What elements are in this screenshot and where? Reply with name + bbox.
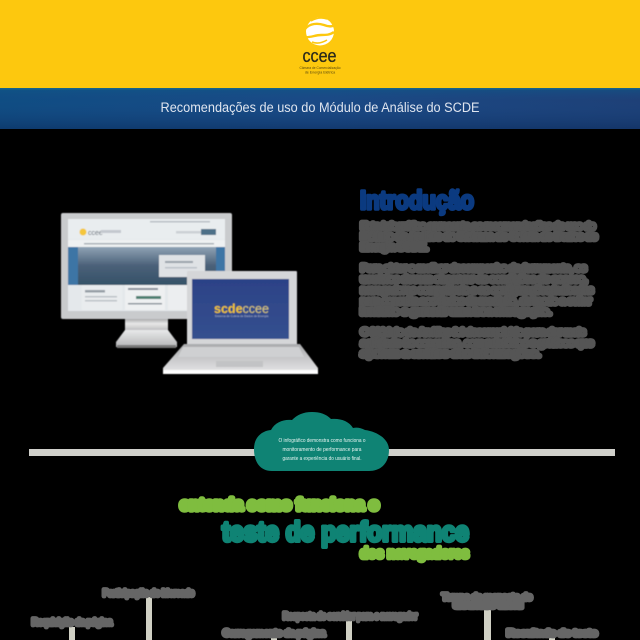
label 1: Participação de Mercado <box>103 588 194 598</box>
logo: ccee: de Energia Elétrica <box>305 70 335 74</box>
laptop: Sistema de Coleta de Dados de Energia <box>215 314 269 318</box>
timeline stem 5 <box>271 637 277 640</box>
illustration: desktop monitor and laptop <box>61 213 318 374</box>
cloud callout: garante a experiência do usuário final. <box>282 456 362 462</box>
monitor screen: website: ccee <box>88 230 103 237</box>
text block: intro paragraph 3: apoiam a análise das informações. <box>361 348 540 360</box>
heading: teste de performance: teste de performance <box>222 516 469 547</box>
text block: intro paragraph 2: lentidão e garantir uma boa navegação. <box>361 306 551 318</box>
monitor body <box>61 213 232 319</box>
text block: intro paragraph 2: Para obter o melhor desempenho da ferramenta, os <box>361 263 586 274</box>
laptop <box>163 271 318 374</box>
heading: entenda como funciona o: entenda como funciona o <box>180 495 379 514</box>
label 5: usuário final <box>454 600 522 610</box>
timeline stem 1 <box>146 597 152 640</box>
logo: ccee: ccee <box>302 46 336 66</box>
title band <box>0 88 640 129</box>
timeline stem 4 <box>484 609 491 640</box>
heading: Introdução: Introdução <box>360 185 474 215</box>
divider line right <box>387 449 615 456</box>
text block: intro paragraph 2: usuários devem observar as condições de acesso, <box>361 274 587 285</box>
logo: ccee: Câmara de Comercialização <box>300 66 340 70</box>
label 2: Requisição da página <box>32 617 112 627</box>
label 4: Carregamento da página <box>223 628 325 638</box>
text block: intro paragraph 2: para consulta aos dados de medição, de modo a evitar <box>361 296 591 307</box>
cloud callout: monitoramento de performance para <box>282 447 362 453</box>
cloud callout <box>254 412 389 471</box>
monitor stand <box>116 318 177 348</box>
monitor screen: website <box>68 219 225 311</box>
text block: intro paragraph 3: agilidade às consultas, com relatórios e gráficos que <box>361 338 593 349</box>
header: yellow background <box>0 0 640 88</box>
text block: intro paragraph 3 <box>361 327 593 360</box>
text block: intro paragraph 1 <box>361 221 597 253</box>
text block: intro paragraph 2 <box>361 263 593 318</box>
text block: intro paragraph 1: Módulo de Análise do Sistema de Coleta de Dados de <box>361 232 597 242</box>
cloud callout: O infográfico demonstra como funciona o <box>278 438 366 444</box>
logo: ccee <box>300 18 340 74</box>
heading: dos navegadores: dos navegadores <box>360 545 469 562</box>
divider line left <box>29 449 255 456</box>
text block: intro paragraph 3: O Módulo de Análise foi desenvolvido para dar mais <box>361 327 585 338</box>
label 6: Resultado do teste <box>507 628 597 638</box>
timeline stem 3 <box>346 620 352 640</box>
laptop: scdeccee <box>214 301 269 316</box>
text block: intro paragraph 1: Energia SCDE. <box>361 242 428 253</box>
timeline stem 2 <box>69 627 75 640</box>
label 5 <box>442 592 532 610</box>
text block: intro paragraph 2: navegadores compatíveis e as configurações indicadas <box>361 285 593 296</box>
label 3: Resposta do servidor para o navegador <box>283 611 417 621</box>
timeline stem 6 <box>549 637 555 640</box>
label 5: Tempo de resposta do <box>442 592 532 602</box>
title band: Recomendações de uso do Módulo de Análise do SCDE <box>160 100 480 115</box>
text block: intro paragraph 1: Este infográfico apresenta as recomendações de uso do <box>361 221 595 232</box>
